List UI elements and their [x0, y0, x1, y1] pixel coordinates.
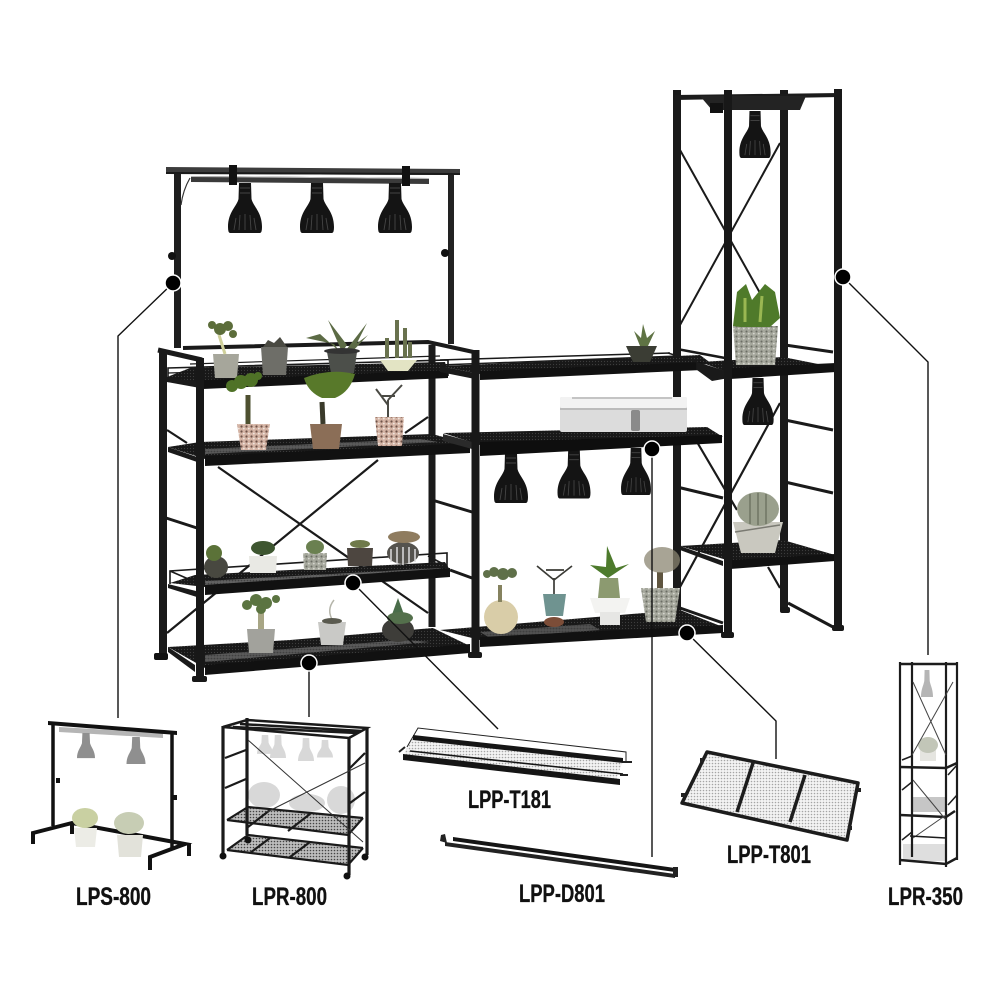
shelf: middle second [443, 427, 723, 456]
product: LPR-800 rack [220, 718, 368, 880]
lamp: tall rack lower [742, 378, 774, 425]
lamp: left [228, 183, 262, 233]
product: LPS-800 light stand [33, 721, 189, 870]
tall rack top frame [675, 93, 840, 113]
product: LPR-350 tall rack [900, 662, 957, 867]
lamp: right [378, 183, 412, 233]
product: LPP-T801 shelf panel [681, 752, 861, 840]
label: LPS-800: LPS-800 [76, 883, 151, 911]
plants: left rack third shelf [204, 531, 420, 578]
label: LPP-D801: LPP-D801 [519, 880, 605, 908]
shelf: left rack top [167, 362, 448, 389]
toolbox [560, 397, 687, 432]
product: LPP-T181 tray [399, 728, 632, 785]
shelf: middle bottom [440, 610, 723, 647]
light stand above left rack [166, 165, 460, 348]
label: LPR-350: LPR-350 [888, 883, 963, 911]
label: LPR-800: LPR-800 [252, 883, 327, 911]
left rack top frame [158, 342, 478, 378]
plants: left rack second shelf [226, 372, 404, 450]
shelf: middle top [440, 353, 712, 380]
plants: tall rack [733, 284, 783, 553]
shelf: tall rack lower [680, 540, 835, 569]
shelf: left rack second [168, 434, 470, 466]
lamp: tall rack upper [739, 111, 771, 158]
middle rack lamps [494, 448, 651, 503]
left rack back posts and bracing [163, 345, 472, 658]
lamp: centre [300, 183, 334, 233]
main rack assembly [118, 89, 928, 857]
tall rack back posts and bracing [677, 90, 833, 627]
front posts [192, 89, 844, 682]
plants: left rack top shelf [208, 320, 417, 378]
plants: left rack bottom shelf [242, 594, 414, 653]
shelf: left rack third [168, 553, 450, 598]
plants: middle rack [483, 324, 680, 634]
product: LPP-D801 bar [440, 834, 678, 878]
label: LPP-T181: LPP-T181 [468, 786, 551, 814]
shelf: tall rack upper [697, 357, 836, 381]
callout dots [165, 269, 851, 671]
callout leaders [118, 277, 928, 857]
label: LPP-T801: LPP-T801 [727, 841, 811, 869]
shelf: left rack bottom [168, 628, 470, 675]
